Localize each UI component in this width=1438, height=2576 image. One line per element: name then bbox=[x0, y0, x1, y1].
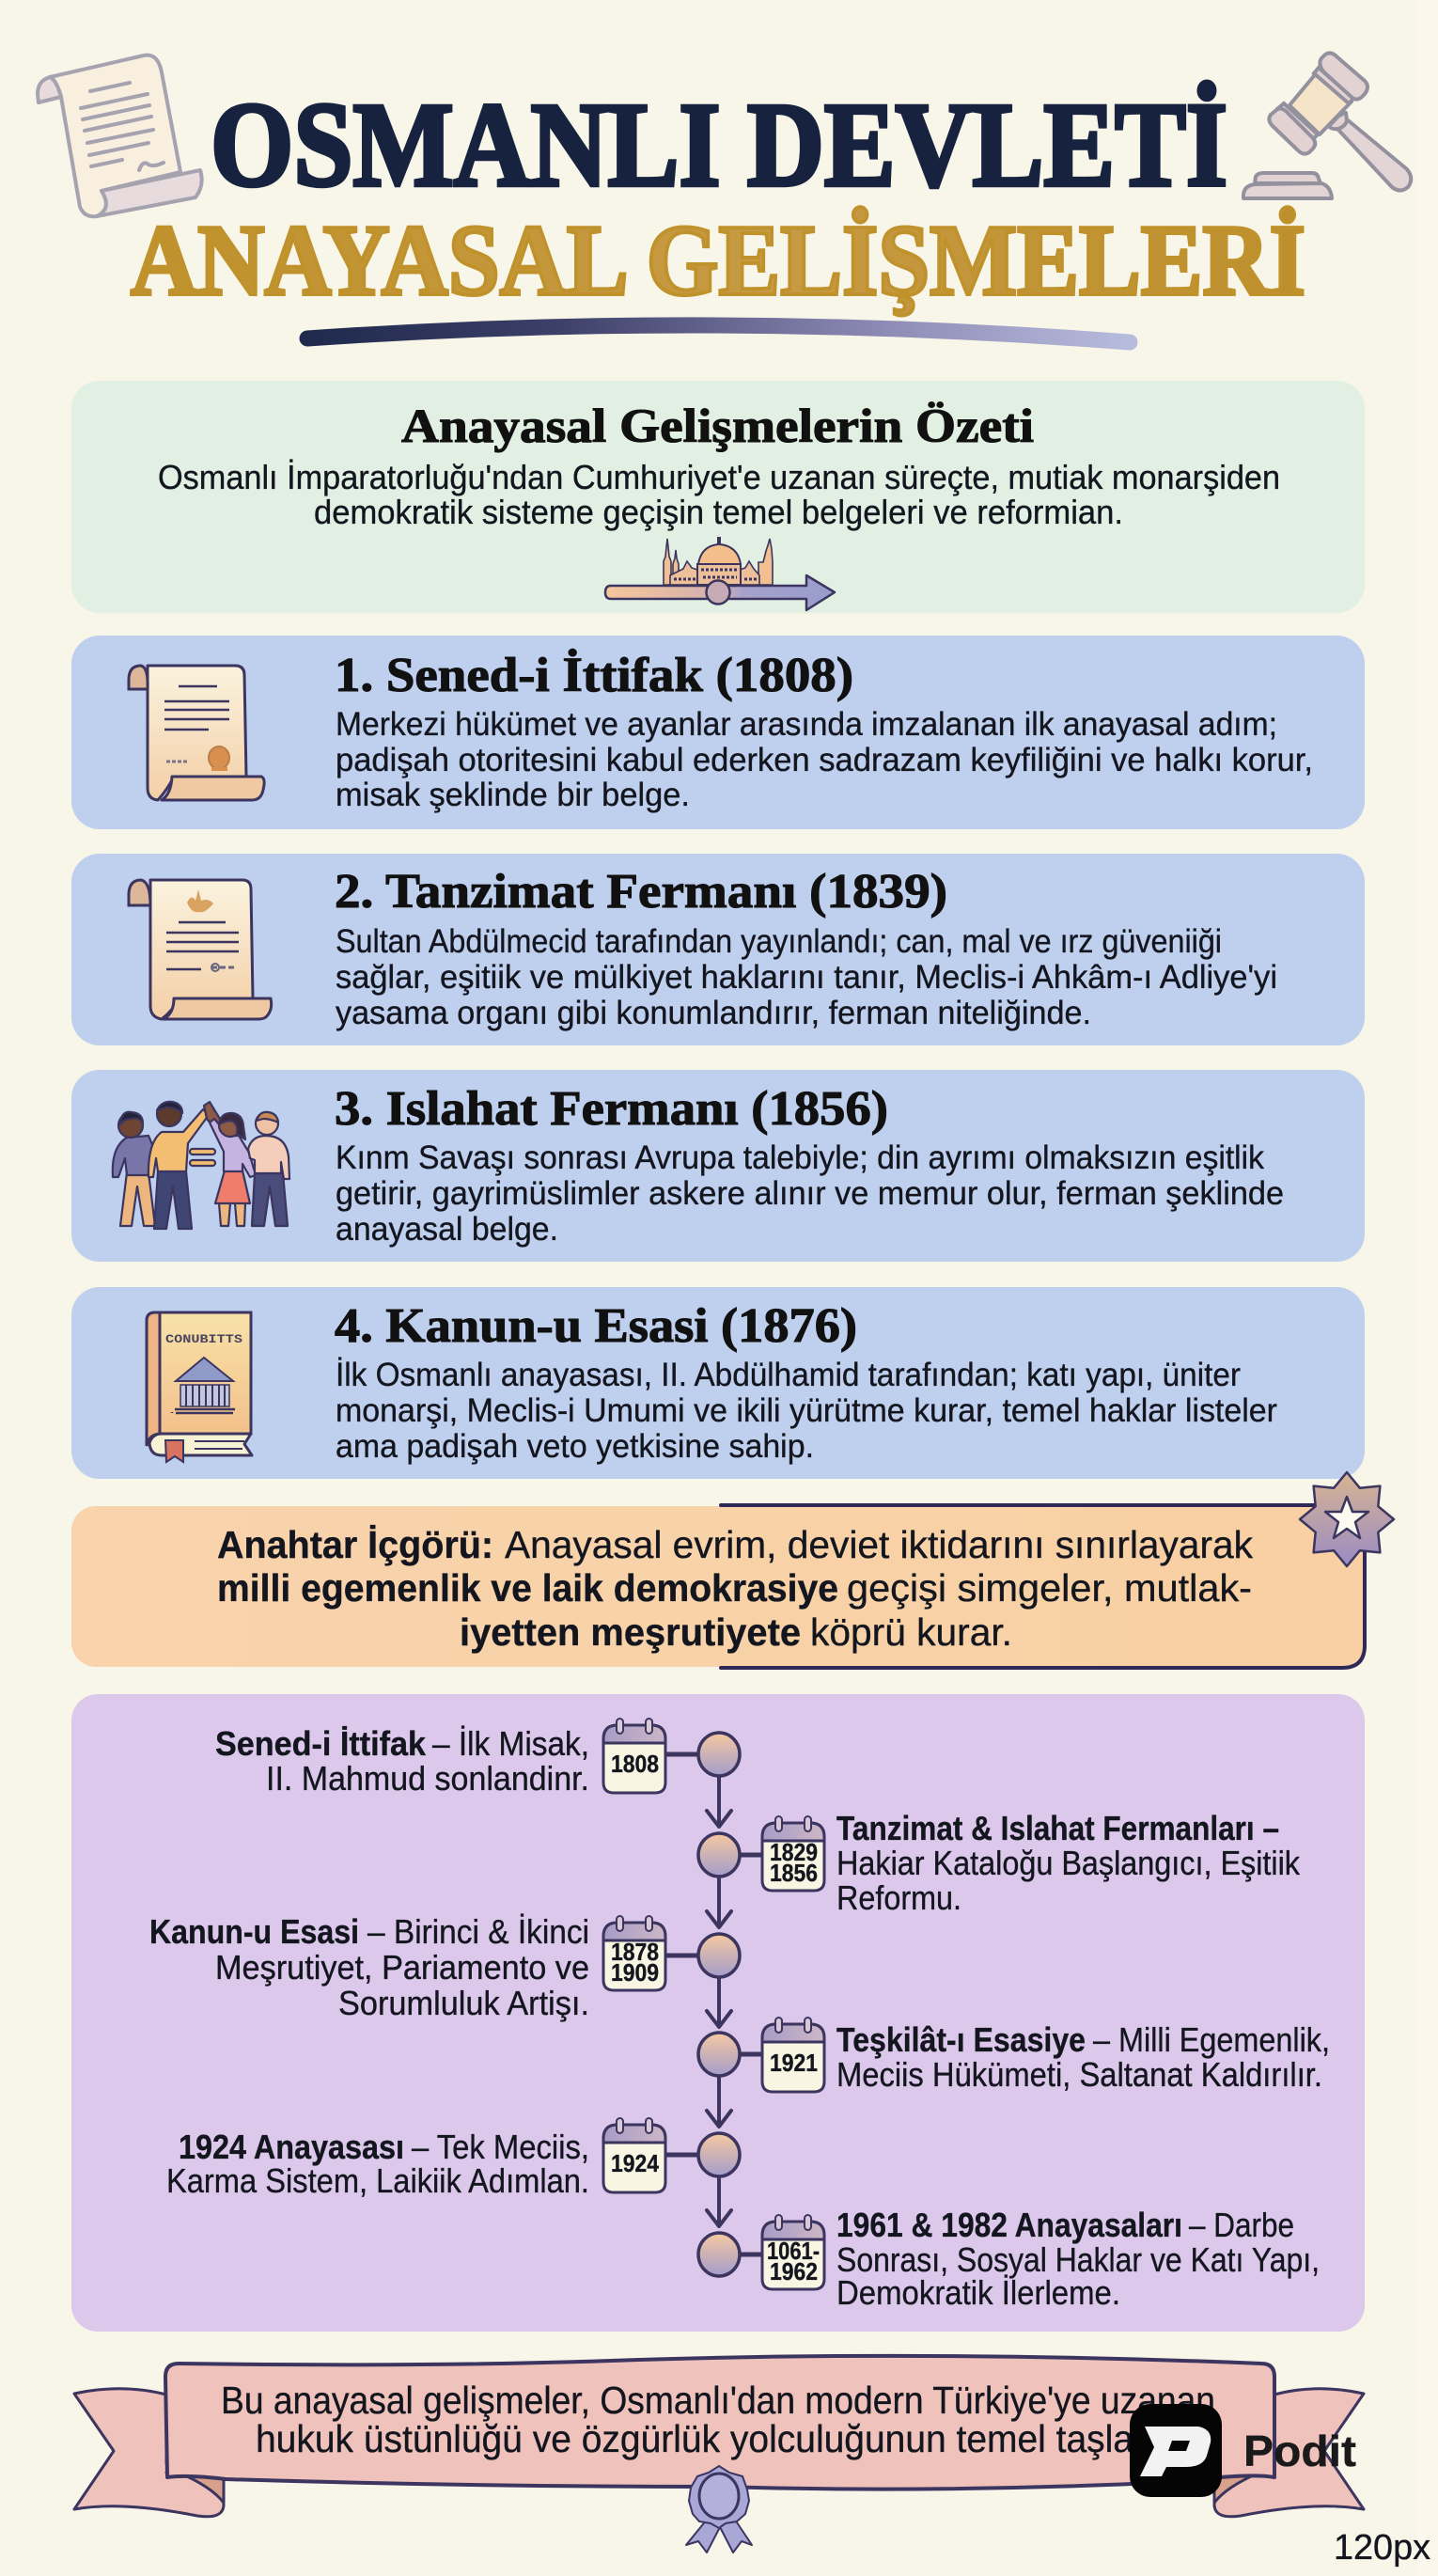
timeline item: Kanun-u Esasi bbox=[149, 1912, 740, 2022]
timeline item: Teşkilât-ı Esasiye bbox=[698, 2018, 1330, 2094]
watermark logo bbox=[1130, 2404, 1222, 2497]
timeline item: Teşkilât-ı Esasiye: Meciis Hükümeti, Saltanat Kaldırılır. bbox=[836, 2055, 1322, 2094]
icon: parchment scroll bbox=[38, 55, 202, 216]
timeline item: Kanun-u Esasi: Kanun-u Esasi bbox=[149, 1912, 359, 1951]
size label: 120px bbox=[1334, 2528, 1430, 2568]
timeline item: 1924 Anayasası: 1924 Anayasası bbox=[179, 2128, 404, 2166]
timeline item: 1924 Anayasası: – Tek Meciis, bbox=[412, 2128, 589, 2166]
panel: summary bbox=[71, 381, 1365, 613]
insight text: Anahtar İçgörü: bbox=[217, 1523, 493, 1566]
timeline item: Tanzimat & Islahat: 1856 bbox=[770, 1859, 818, 1887]
insight text: köprü kurar. bbox=[810, 1610, 1012, 1654]
timeline item: Tanzimat & Islahat bbox=[698, 1809, 1301, 1917]
timeline item: Teşkilât-ı Esasiye: Teşkilât-ı Esasiye bbox=[836, 2020, 1086, 2059]
timeline item: 1961 & 1982: Demokratik İlerleme. bbox=[836, 2273, 1120, 2312]
icon: star badge bbox=[1300, 1472, 1394, 1566]
banner text: Bu anayasal gelişmeler, Osmanlı'dan modern Türkiye'ye uzanan bbox=[221, 2379, 1215, 2422]
summary text: Osmanlı İmparatorluğu'ndan Cumhuriyet'e uzanan süreçte, mutiak monarşiden bbox=[158, 458, 1280, 496]
panel: timeline bbox=[71, 1694, 1365, 2332]
insight text: geçişi simgeler, mutlak- bbox=[847, 1566, 1252, 1610]
summary text bbox=[158, 458, 1280, 531]
description bbox=[336, 923, 1277, 1031]
description: ama padişah veto yetkisine sahip. bbox=[336, 1428, 814, 1465]
description: Kınm Savaşı sonrası Avrupa talebiyle; din ayrımı olmaksızın eşitlik bbox=[336, 1139, 1264, 1176]
timeline item: 1924 Anayasası: Karma Sistem, Laikiik Adımlan. bbox=[166, 2161, 589, 2200]
icon: constitution book: CONUBITTS bbox=[165, 1332, 242, 1346]
timeline item: Tanzimat & Islahat: Reformu. bbox=[836, 1878, 961, 1917]
timeline item: Kanun-u Esasi: Sorumluluk Artişı. bbox=[338, 1984, 589, 2022]
heading: 3. Islahat Fermanı (1856) bbox=[335, 1082, 888, 1136]
timeline item: Tanzimat & Islahat: 1829 bbox=[770, 1838, 818, 1866]
description: Merkezi hükümet ve ayanlar arasında imzalanan ilk anayasal adım; bbox=[336, 706, 1277, 743]
timeline item: Sened-i İttifak bbox=[215, 1719, 740, 1798]
panel: Islahat Fermanı bbox=[71, 1070, 1365, 1262]
timeline spine with arrows bbox=[707, 1776, 731, 2226]
summary text: demokratik sisteme geçişin temel belgeleri ve reformian. bbox=[314, 493, 1123, 531]
description bbox=[336, 706, 1313, 813]
timeline item: 1961 & 1982: 1061- bbox=[767, 2237, 820, 2265]
timeline item: Kanun-u Esasi: 1878 bbox=[611, 1938, 659, 1966]
description: İlk Osmanlı anayasası, II. Abdülhamid tarafından; katı yapı, üniter bbox=[336, 1357, 1241, 1393]
description: getirir, gayrimüslimler askere alınır ve memur olur, ferman şeklinde bbox=[336, 1175, 1284, 1212]
timeline item: Tanzimat & Islahat: Hakiar Kataloğu Başlangıcı, Eşitiik bbox=[836, 1844, 1301, 1882]
icon: constitution book bbox=[147, 1312, 252, 1462]
title: Osmanlı Devleti: OSMANLI DEVLETİ bbox=[211, 78, 1227, 212]
timeline item: Sened-i İttifak: – İlk Misak, bbox=[432, 1724, 589, 1763]
timeline item: 1961 & 1982: – Darbe bbox=[1189, 2206, 1294, 2244]
description: sağlar, eşitiik ve mülkiyet haklarını tanır, Meclis-i Ahkâm-ı Adliye'yi bbox=[336, 959, 1277, 996]
icon: gavel bbox=[1243, 53, 1411, 198]
timeline item: Sened-i İttifak: 1808 bbox=[611, 1750, 659, 1778]
timeline item: Tanzimat & Islahat: Tanzimat & Islahat Fermanları – bbox=[836, 1809, 1279, 1847]
panel: Kanun-u Esasi bbox=[71, 1287, 1365, 1479]
timeline item: Kanun-u Esasi: – Birinci & İkinci bbox=[367, 1912, 589, 1951]
timeline item: Teşkilât-ı Esasiye: 1921 bbox=[770, 2049, 818, 2077]
description: padişah otoritesini kabul ederken sadrazam keyfiliğini ve halkı korur, bbox=[336, 742, 1313, 778]
description: misak şeklinde bir belge. bbox=[336, 777, 690, 813]
insight text bbox=[217, 1523, 1253, 1654]
timeline item: Sened-i İttifak: Sened-i İttifak bbox=[215, 1724, 427, 1763]
timeline item: Kanun-u Esasi: 1909 bbox=[611, 1958, 659, 1987]
ribbon banner bbox=[74, 2356, 1364, 2552]
description: monarşi, Meclis-i Umumi ve ikili yürütme kurar, temel haklar listeler bbox=[336, 1392, 1277, 1429]
watermark name: Podit bbox=[1243, 2427, 1356, 2475]
banner text: hukuk üstünlüğü ve özgürlük yolculuğunun temel taşlarıdır. bbox=[256, 2417, 1207, 2460]
description bbox=[336, 1139, 1284, 1248]
timeline item: 1961 & 1982: 1961 & 1982 Anayasaları bbox=[836, 2206, 1182, 2244]
icon: mosque on timeline arrow bbox=[605, 538, 835, 610]
timeline item: Sened-i İttifak: II. Mahmud sonlandinr. bbox=[266, 1759, 589, 1798]
icon: medal rosette bbox=[686, 2466, 752, 2552]
insight text: milli egemenlik ve laik demokrasiye bbox=[217, 1566, 838, 1610]
icon: sealed scroll bbox=[129, 666, 264, 800]
icon: people holding hands bbox=[113, 1102, 289, 1229]
heading: 1. Sened-i İttifak (1808) bbox=[335, 649, 853, 702]
heading: 2. Tanzimat Fermanı (1839) bbox=[335, 865, 947, 919]
timeline item: 1961 & 1982: 1962 bbox=[770, 2257, 818, 2285]
timeline item: Kanun-u Esasi: Meşrutiyet, Pariamento ve bbox=[215, 1948, 589, 1987]
callout: key insight bbox=[71, 1472, 1394, 1668]
heading: 4. Kanun-u Esasi (1876) bbox=[335, 1299, 857, 1353]
description: Sultan Abdülmecid tarafından yayınlandı; can, mal ve ırz güveniiği bbox=[336, 923, 1222, 960]
description bbox=[336, 1357, 1277, 1465]
timeline item: 1961 & 1982 bbox=[698, 2206, 1320, 2312]
description: yasama organı gibi konumlandırır, ferman niteliğinde. bbox=[336, 995, 1091, 1031]
panel: Sened-i İttifak bbox=[71, 636, 1365, 829]
insight text: iyetten meşrutiyete bbox=[460, 1610, 801, 1654]
timeline item: 1924 Anayasası bbox=[166, 2118, 740, 2200]
title underline bbox=[307, 325, 1130, 342]
timeline item: Teşkilât-ı Esasiye: – Milli Egemenlik, bbox=[1093, 2020, 1330, 2059]
insight text: Anayasal evrim, deviet iktidarını sınırlayarak bbox=[505, 1523, 1253, 1566]
panel: Tanzimat Fermanı bbox=[71, 854, 1365, 1045]
subtitle: Anayasal Gelişmeleri: ANAYASAL GELİŞMELERİ bbox=[131, 205, 1305, 317]
summary heading: Anayasal Gelişmelerin Özeti bbox=[401, 401, 1034, 453]
timeline item: 1924 Anayasası: 1924 bbox=[611, 2149, 659, 2177]
banner text bbox=[221, 2379, 1215, 2460]
icon: decree scroll bbox=[129, 880, 272, 1019]
description: anayasal belge. bbox=[336, 1211, 558, 1248]
timeline item: 1961 & 1982: Sonrası, Sosyal Haklar ve Katı Yapı, bbox=[836, 2240, 1320, 2279]
